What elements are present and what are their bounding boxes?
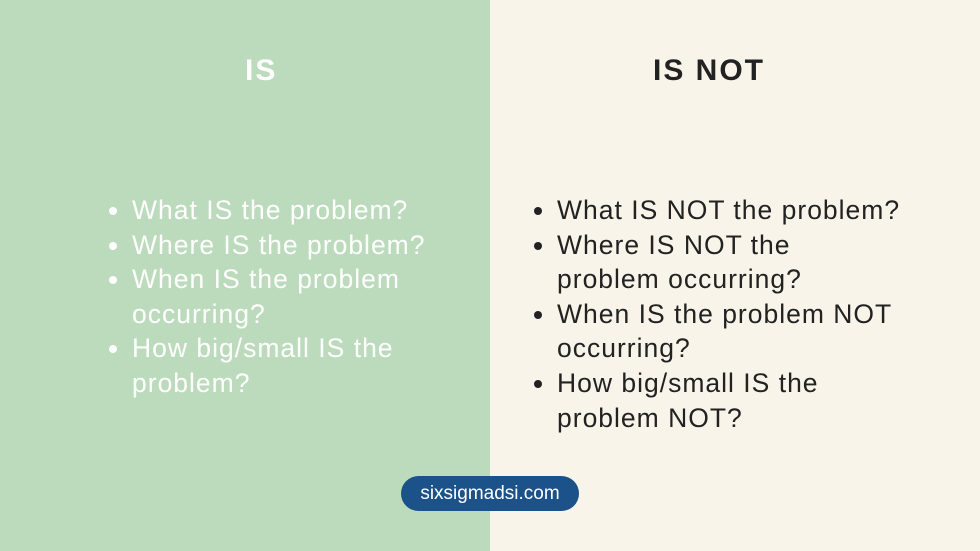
list: IS questions: How big/small IS the xyxy=(132,333,394,363)
list: IS questions: Where IS the problem? xyxy=(132,230,426,260)
list: IS NOT questions: How big/small IS the xyxy=(557,368,819,398)
list: IS NOT questions xyxy=(534,195,900,433)
heading: IS NOT: IS NOT xyxy=(653,54,765,87)
list: IS questions xyxy=(109,195,426,398)
heading: IS: IS xyxy=(245,54,277,87)
list: IS NOT questions: problem occurring? xyxy=(557,264,802,294)
badge: website: sixsigmadsi.com xyxy=(420,483,560,504)
list: IS NOT questions: When IS the problem NOT xyxy=(557,299,892,329)
list: IS questions: occurring? xyxy=(132,299,266,329)
list: IS questions: When IS the problem xyxy=(132,264,400,294)
panel: IS NOT xyxy=(490,0,980,551)
list: IS questions: problem? xyxy=(132,368,250,398)
list: IS NOT questions: problem NOT? xyxy=(557,403,743,433)
list: IS NOT questions: What IS NOT the problem? xyxy=(557,195,900,225)
badge: website xyxy=(401,476,579,511)
list: IS NOT questions: Where IS NOT the xyxy=(557,230,790,260)
list: IS questions: What IS the problem? xyxy=(132,195,408,225)
list: IS NOT questions: occurring? xyxy=(557,333,691,363)
panel: IS xyxy=(0,0,490,551)
